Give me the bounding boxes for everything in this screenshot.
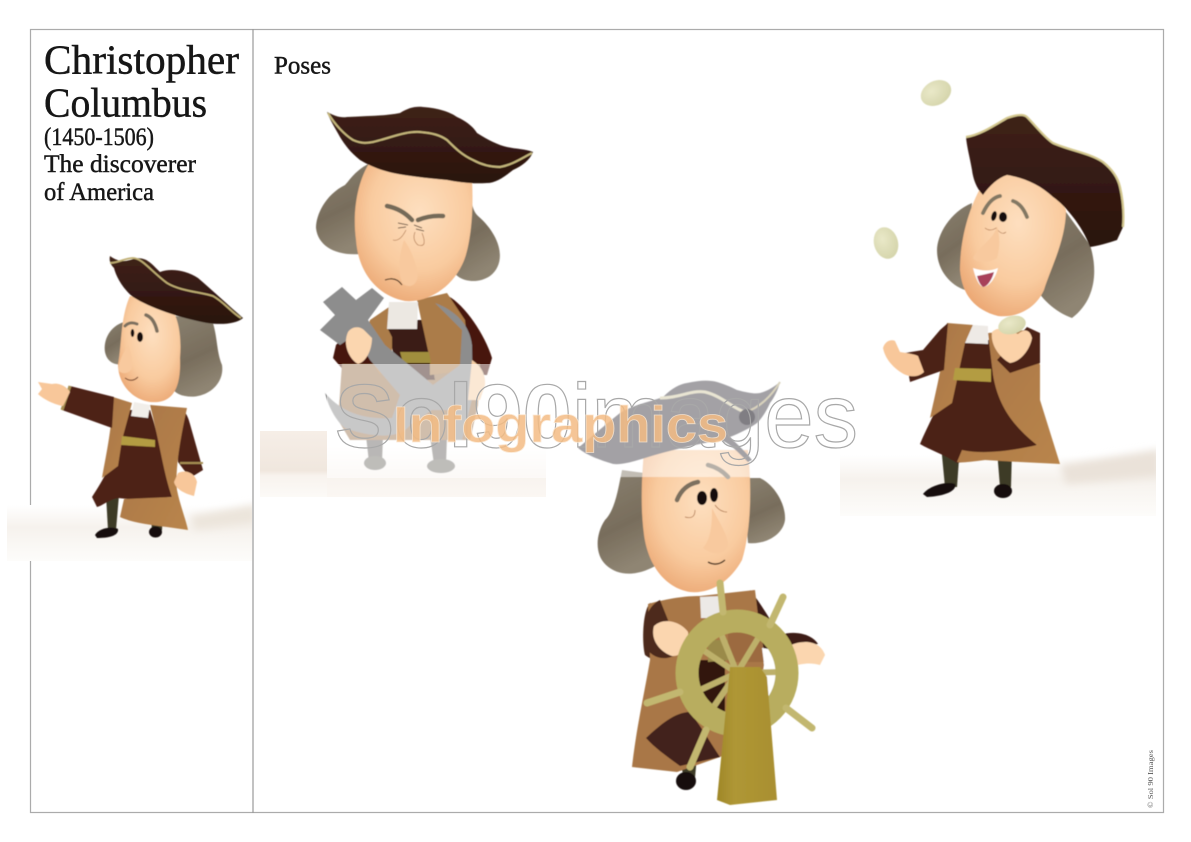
coat xyxy=(930,323,1060,464)
hat xyxy=(578,381,780,464)
facial features xyxy=(385,206,443,286)
sleeve front xyxy=(644,600,680,658)
title: Christopher xyxy=(44,36,239,82)
title: (1450-1506) xyxy=(44,124,154,151)
washed eyebrow xyxy=(708,465,728,477)
face xyxy=(118,296,180,402)
legs and shoes xyxy=(95,495,164,538)
watermark: Infographics: Infographics xyxy=(393,396,728,453)
overlay wash on head xyxy=(597,440,790,477)
right arm xyxy=(172,409,203,478)
dress xyxy=(92,410,172,507)
dress xyxy=(920,340,1037,463)
pointing arm xyxy=(62,386,114,428)
ground shadow: pointing pose xyxy=(7,504,256,561)
character: pointing pose xyxy=(38,256,243,538)
legs and shoes xyxy=(364,436,455,473)
face xyxy=(642,450,750,592)
hands xyxy=(38,382,197,496)
facial features xyxy=(677,482,728,564)
leg and shoe xyxy=(676,745,698,790)
hat xyxy=(966,115,1123,247)
right hand xyxy=(992,328,1032,363)
collar xyxy=(700,596,720,618)
face xyxy=(960,171,1066,316)
facial features xyxy=(973,196,1027,287)
coat xyxy=(102,397,188,530)
flying egg left xyxy=(870,224,902,262)
title xyxy=(44,36,239,206)
hair xyxy=(937,190,1094,318)
hair xyxy=(598,470,785,574)
face xyxy=(355,162,473,301)
egg in hand xyxy=(996,313,1028,337)
watermark panel xyxy=(327,364,546,478)
coat lower xyxy=(338,364,480,440)
watermark: Sol90images: Sol90images xyxy=(335,367,858,467)
title: of America xyxy=(44,179,154,206)
ship wheel xyxy=(647,583,812,767)
dress band and belt xyxy=(388,329,431,363)
hair xyxy=(105,316,222,397)
title: The discoverer xyxy=(44,151,197,178)
character: anchor pose xyxy=(316,107,533,473)
hair xyxy=(316,162,500,281)
left hand xyxy=(883,340,924,376)
collar and belt xyxy=(121,402,155,447)
left sleeve xyxy=(643,603,690,660)
coat xyxy=(632,590,764,772)
left sleeve xyxy=(905,323,948,382)
right sleeve xyxy=(750,590,818,655)
character: ship wheel pose xyxy=(578,381,825,805)
dress xyxy=(385,320,435,380)
ground shadow: juggling pose xyxy=(840,447,1156,506)
hat xyxy=(327,107,533,183)
sleeves xyxy=(333,296,492,375)
belt xyxy=(953,368,991,382)
left hand xyxy=(653,621,688,656)
hands xyxy=(346,327,485,400)
flying egg top xyxy=(916,75,956,111)
title: Columbus xyxy=(44,80,207,126)
legs and shoes xyxy=(923,445,1012,498)
collar xyxy=(965,325,988,344)
hat xyxy=(110,256,243,324)
right sleeve xyxy=(997,327,1040,373)
character: juggling pose xyxy=(870,75,1123,498)
collar xyxy=(387,302,418,330)
anchor xyxy=(320,287,473,440)
coat xyxy=(362,293,470,375)
copyright: © Sol 90 Images xyxy=(1146,750,1155,808)
facial features xyxy=(119,315,157,380)
ground shadow: anchor pose xyxy=(260,431,546,497)
heading: poses: Poses xyxy=(274,52,331,80)
inner dress xyxy=(646,632,776,766)
right hand xyxy=(791,642,825,666)
wheel post xyxy=(717,667,777,805)
